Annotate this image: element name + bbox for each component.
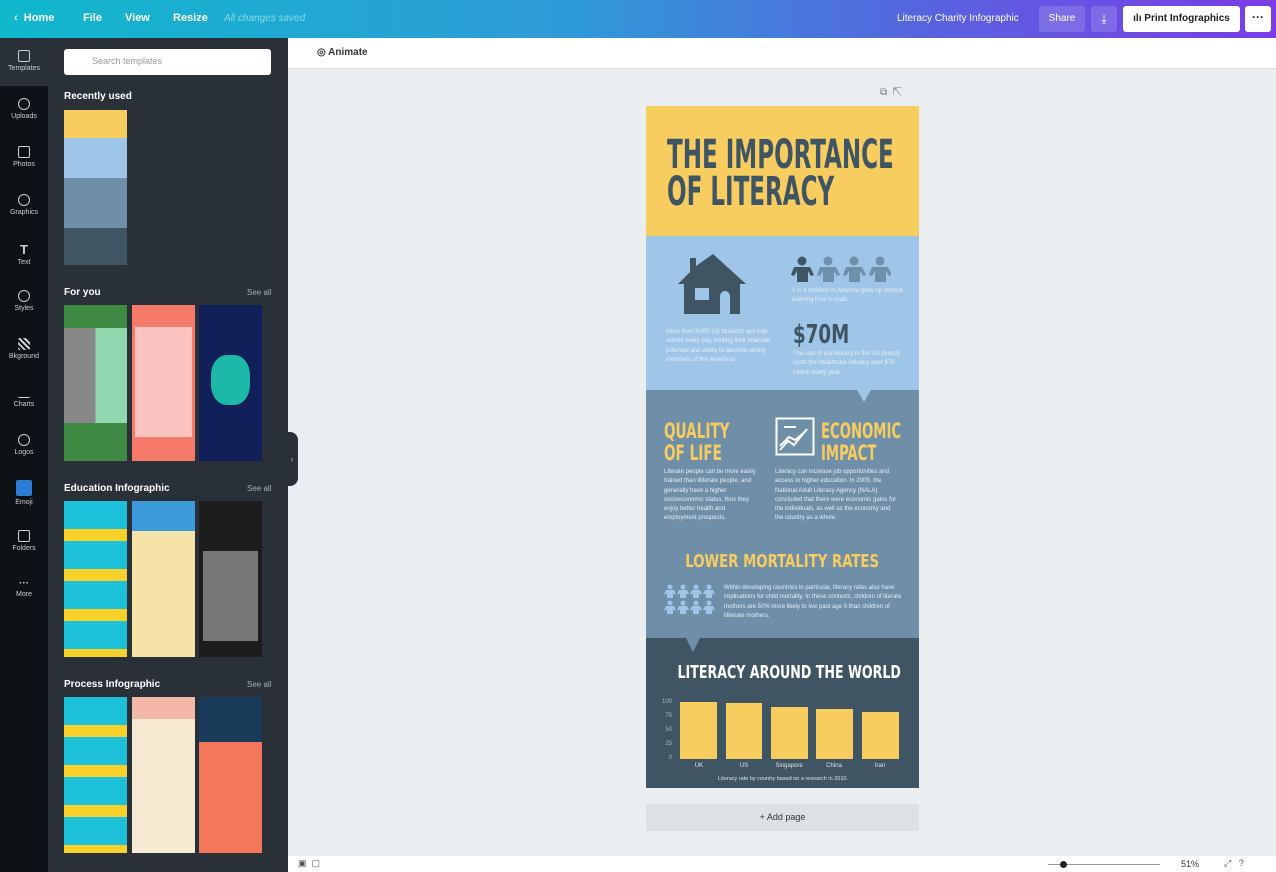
left icon rail: More xyxy=(16,591,32,598)
bottom bar: ⤢ ? xyxy=(1224,858,1244,868)
bar chart: Singapore xyxy=(775,763,803,769)
left icon rail xyxy=(0,38,48,872)
text: mortality: Within developing countries in particular, literacy rates also have implications for child mortality. In these contexts, children of literate mothers are 50% more likely to live past age 5 than children of illiterate mothers. xyxy=(724,585,901,619)
add page button: + Add page xyxy=(760,812,805,822)
bar chart: US xyxy=(740,763,748,769)
templates panel: See all xyxy=(247,288,271,297)
templates panel: See all xyxy=(247,680,271,689)
process thumbnails xyxy=(64,697,127,853)
bar chart: UK xyxy=(695,763,703,769)
left icon rail: Bkground xyxy=(9,353,39,360)
left icon rail: Text xyxy=(18,259,30,266)
left icon rail: T xyxy=(20,242,28,257)
heading: quality of life xyxy=(664,419,730,465)
bottom bar: 51% xyxy=(1181,859,1199,869)
heading: lower mortality: LOWER MORTALITY RATES xyxy=(686,551,879,572)
left icon rail: Uploads xyxy=(11,113,37,120)
icon: children xyxy=(791,256,891,282)
for you heading: For you xyxy=(64,287,101,298)
print button: ılı Print Infographics xyxy=(1133,13,1230,24)
bottom bar xyxy=(288,856,1276,872)
heading: economic impact: ECONOMIC xyxy=(821,419,901,443)
bottom bar: ▣ ▢ xyxy=(298,858,320,868)
icon: children grid xyxy=(664,584,715,614)
document title: Literacy Charity Infographic xyxy=(897,13,1019,24)
bar chart: 50 xyxy=(665,727,673,733)
process heading: Process Infographic xyxy=(64,679,160,690)
more button: ··· xyxy=(1252,10,1264,24)
recent thumbnail xyxy=(64,110,127,265)
zoom slider xyxy=(1048,864,1160,865)
education heading: Education Infographic xyxy=(64,483,170,494)
print button xyxy=(1123,6,1240,32)
left icon rail: Folders xyxy=(12,545,36,552)
search box: Search templates xyxy=(92,56,162,66)
title panel xyxy=(646,106,919,236)
icon: chart xyxy=(776,418,814,456)
left icon rail: Templates xyxy=(8,65,40,72)
heading: quality of life: OF LIFE xyxy=(664,441,722,465)
top bar xyxy=(0,0,1276,38)
big number: $70M xyxy=(793,320,849,350)
nav: home file view resize: ‹ Home xyxy=(14,12,54,24)
bar chart: 25 xyxy=(665,741,673,747)
bar chart: 0 xyxy=(669,755,673,761)
heading: quality of life: QUALITY xyxy=(664,419,730,443)
icon: house xyxy=(678,254,746,314)
left icon rail: Styles xyxy=(14,305,34,312)
collapse tab xyxy=(286,432,298,486)
heading: economic impact xyxy=(821,419,901,465)
saved status: All changes saved xyxy=(224,13,305,24)
heading: economic impact: IMPACT xyxy=(821,441,876,465)
left icon rail: Emoji xyxy=(15,499,33,506)
pointer xyxy=(686,638,700,652)
pointer xyxy=(857,390,871,402)
left icon rail: Graphics xyxy=(10,209,38,216)
search box xyxy=(64,49,271,75)
panel: statistics xyxy=(646,236,919,390)
collapse tab: ‹ xyxy=(290,454,294,464)
chart title: LITERACY AROUND THE WORLD xyxy=(678,662,901,683)
animate toolbar: ◎ Animate xyxy=(317,47,368,58)
bar chart: Literacy rate by country based on a research in 2010. xyxy=(718,776,848,782)
recently used heading: Recently used xyxy=(64,91,132,102)
text: cost: The rate of low literacy in the US directly costs the healthcare industry over $70 million every year. xyxy=(793,351,900,376)
page action icons: ⧉ ⇱ xyxy=(880,87,902,98)
top bar: Resize xyxy=(173,12,208,24)
education thumbnails xyxy=(64,501,127,657)
panel: impacts xyxy=(646,390,919,638)
left icon rail: Photos xyxy=(13,161,35,168)
bar chart: China xyxy=(826,763,842,769)
more button xyxy=(1245,6,1271,32)
title panel: THE IMPORTANCE xyxy=(667,132,894,178)
text: students: More than 3,000 US students quit high school every day, limiting their financial potential and ability to become strong members of the workforce. xyxy=(666,329,770,363)
download button xyxy=(1091,6,1117,32)
templates panel: See all xyxy=(247,484,271,493)
share button: Share xyxy=(1049,13,1075,24)
bar chart xyxy=(662,698,899,782)
left icon rail: Logos xyxy=(14,449,34,456)
templates panel xyxy=(48,38,288,872)
panel: world literacy chart xyxy=(646,638,919,788)
bar chart: 75 xyxy=(665,713,673,719)
download button: ⤓ xyxy=(1101,12,1107,26)
share button xyxy=(1039,6,1085,32)
text: quality: Literate people can be more easily trained than illiterate people, and generally have a higher socioeconomic status, thus they enjoy better health and employment prospects. xyxy=(664,469,756,521)
bar chart: 100 xyxy=(662,699,673,705)
top bar: File xyxy=(83,12,102,24)
left icon rail: Charts xyxy=(14,401,34,408)
for you thumbnails xyxy=(64,305,127,461)
animate toolbar xyxy=(288,38,1276,69)
infographic xyxy=(646,106,919,788)
top bar: View xyxy=(125,12,150,24)
add page button xyxy=(646,804,919,831)
title panel: OF LITERACY xyxy=(667,169,834,215)
text: children stat: 1 in 4 children in America grow up without learning how to read. xyxy=(792,288,903,303)
text: economic: Literacy can increase job opportunities and access to higher education. In 2009, the National Adult Literacy Agency (NALA) concluded that there were economic gains for the individuals, as well as the economy and the country as a whole. xyxy=(775,469,896,521)
left icon rail: ··· xyxy=(19,578,29,589)
bar chart: Iran xyxy=(875,763,885,769)
